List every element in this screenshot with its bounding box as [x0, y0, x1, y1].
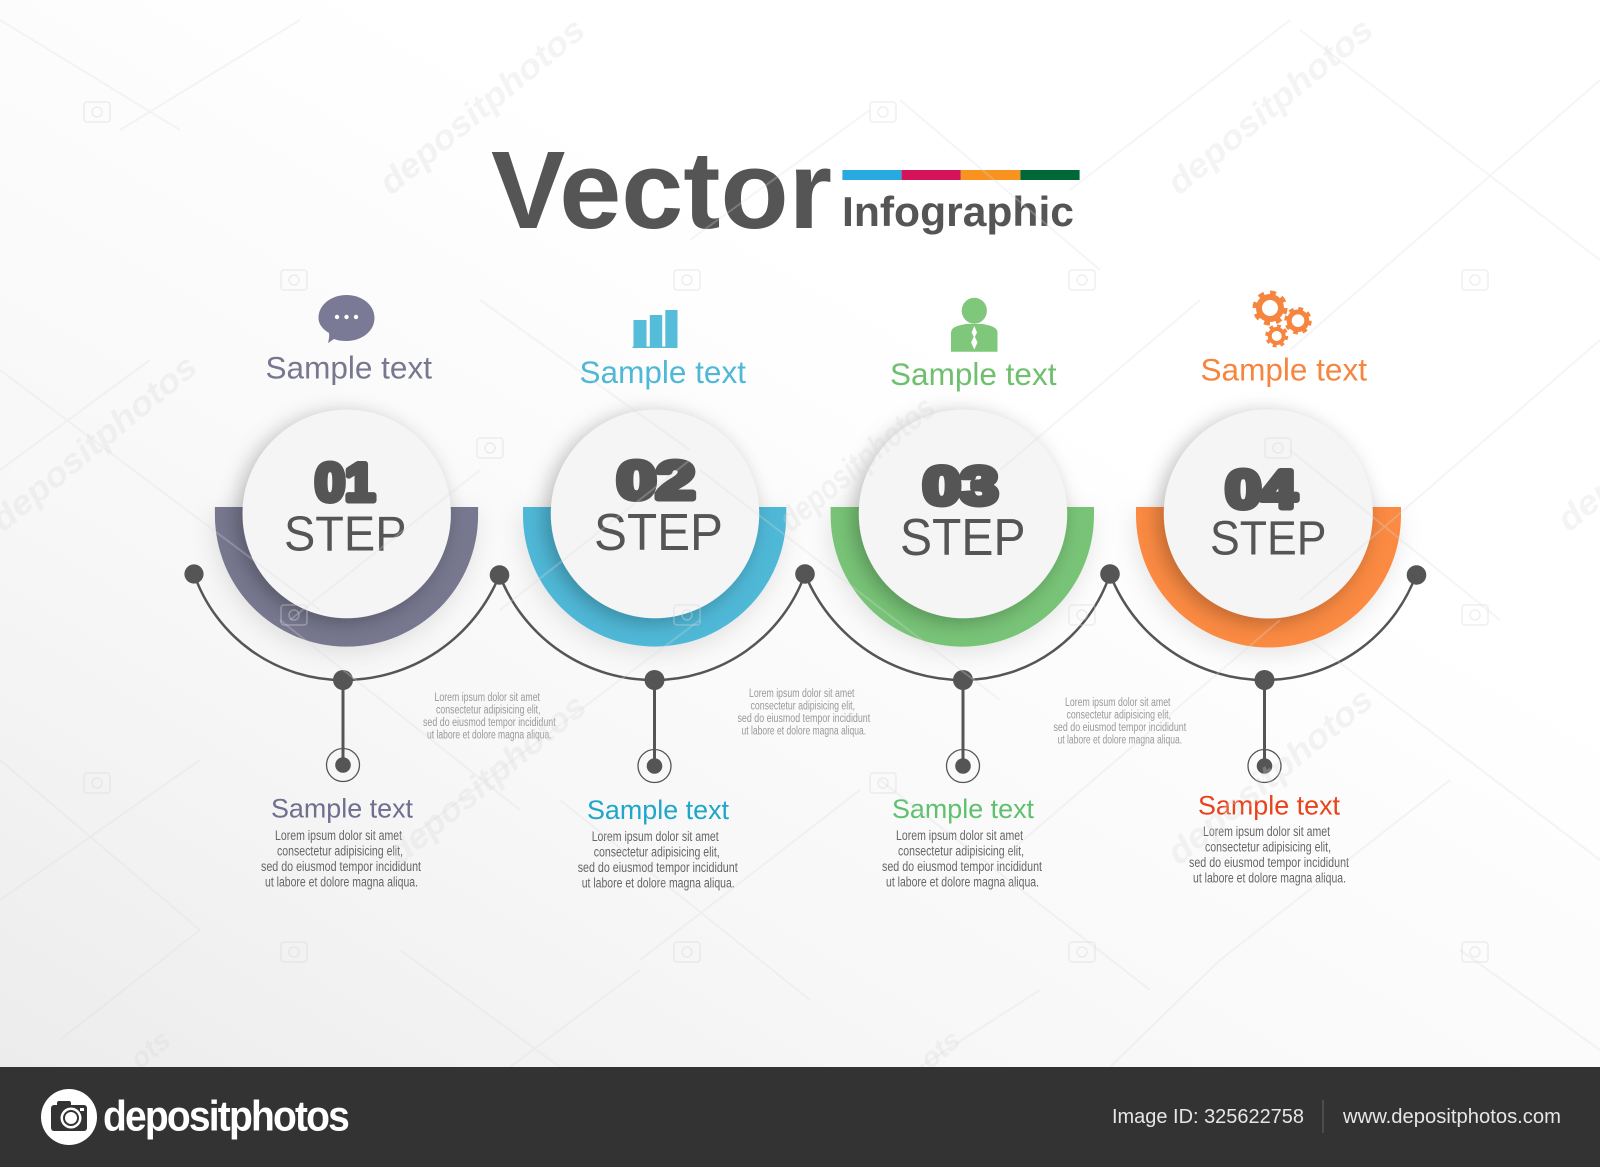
step 4 circle	[1164, 410, 1373, 618]
step 1 caption heading: Sample text	[271, 794, 413, 824]
step 3 caption text	[882, 828, 1042, 890]
step 3 caption text: sed do eiusmod tempor incididunt	[882, 859, 1042, 874]
step 4 half ring	[1136, 507, 1401, 647]
watermark pattern: depositphotos	[772, 389, 942, 539]
side note between steps 2 and 3	[738, 688, 871, 738]
footer logo wordmark: depositphotos	[103, 1092, 349, 1140]
step 4 label: STEP	[1210, 512, 1326, 566]
step 4 caption heading: Sample text	[1198, 790, 1340, 820]
step 2 label: STEP	[594, 504, 723, 562]
step 4 number: 04	[1226, 460, 1297, 520]
step 1 caption text: consectetur adipisicing elit,	[277, 844, 403, 859]
step 4 caption text	[1189, 824, 1349, 886]
step 1 caption text	[261, 828, 421, 890]
step 2 caption text: consectetur adipisicing elit,	[594, 845, 720, 860]
side note between steps 3 and 4: Lorem ipsum dolor sit amet	[1065, 697, 1171, 709]
side note between steps 1 and 2: sed do eiusmod tempor incididunt	[423, 717, 556, 729]
step 2 heading: Sample text	[580, 354, 746, 390]
connector arcs and nodes	[184, 564, 1426, 680]
watermark pattern: ots	[124, 1024, 176, 1075]
title word: Infographic: Infographic	[842, 188, 1074, 235]
side note between steps 2 and 3: ut labore et dolore magna aliqua.	[742, 726, 866, 738]
step 3 caption heading: Sample text	[892, 794, 1034, 824]
step 4 icon: gears	[1254, 292, 1310, 346]
step 3 icon: person with tie	[951, 298, 998, 352]
side note between steps 2 and 3: Lorem ipsum dolor sit amet	[749, 688, 855, 700]
step 1 half ring	[215, 507, 478, 647]
step 3 caption text: ut labore et dolore magna aliqua.	[886, 875, 1039, 890]
watermark pattern: depositphotos	[381, 687, 594, 872]
step 2 stem and target	[638, 670, 671, 782]
step 3 number: 03	[923, 457, 998, 516]
step 1 stem and target	[326, 670, 360, 782]
step 1	[215, 295, 478, 890]
step 2 half ring	[523, 507, 786, 647]
step 3 label: STEP	[900, 509, 1026, 567]
watermark pattern: ots	[914, 1024, 966, 1075]
step 1 icon: speech bubble	[318, 295, 374, 343]
title word: Vector: Vector	[491, 129, 832, 252]
step 2 caption text	[578, 829, 738, 891]
step 2 caption text: Lorem ipsum dolor sit amet	[592, 829, 719, 844]
step 3	[831, 298, 1094, 890]
step 3 caption text: Lorem ipsum dolor sit amet	[896, 828, 1023, 843]
side note between steps 3 and 4: consectetur adipisicing elit,	[1066, 709, 1171, 721]
side note between steps 1 and 2: consectetur adipisicing elit,	[436, 704, 540, 716]
step 1 caption text: sed do eiusmod tempor incididunt	[261, 859, 421, 874]
step 4	[1136, 292, 1401, 886]
step 3 caption text: consectetur adipisicing elit,	[898, 844, 1024, 859]
step 2 caption heading: Sample text	[587, 795, 729, 825]
step 1 caption text: ut labore et dolore magna aliqua.	[265, 875, 418, 890]
side note between steps 2 and 3: sed do eiusmod tempor incididunt	[738, 713, 871, 725]
step 1 label: STEP	[284, 508, 406, 562]
step 1 number: 01	[315, 454, 375, 512]
side note between steps 3 and 4: sed do eiusmod tempor incididunt	[1054, 722, 1187, 734]
side note between steps 2 and 3: consectetur adipisicing elit,	[750, 700, 855, 712]
side note between steps 1 and 2: Lorem ipsum dolor sit amet	[434, 692, 541, 704]
step 2 circle	[551, 410, 759, 618]
footer website: www.depositphotos.com	[1342, 1106, 1561, 1128]
side note between steps 3 and 4	[1054, 697, 1187, 747]
step 4 caption text: sed do eiusmod tempor incididunt	[1189, 855, 1349, 870]
footer bar	[0, 1067, 1600, 1167]
step 2 caption text: sed do eiusmod tempor incididunt	[578, 860, 738, 875]
side note between steps 3 and 4: ut labore et dolore magna aliqua.	[1058, 735, 1182, 747]
step 3 heading: Sample text	[890, 356, 1057, 392]
watermark pattern: depositphotos	[1160, 680, 1381, 872]
step 4 stem and target	[1248, 670, 1281, 782]
side note between steps 1 and 2: ut labore et dolore magna aliqua.	[427, 730, 552, 742]
step 1 caption text: Lorem ipsum dolor sit amet	[275, 828, 402, 843]
step 4 caption text: ut labore et dolore magna aliqua.	[1193, 871, 1346, 886]
footer image id: Image ID: 325622758	[1112, 1106, 1304, 1128]
step 2 caption text: ut labore et dolore magna aliqua.	[582, 876, 735, 891]
step 2 icon: bar chart	[632, 310, 678, 348]
step 2	[523, 310, 786, 891]
step 4 caption text: consectetur adipisicing elit,	[1205, 840, 1331, 855]
title colour bar	[842, 170, 1080, 180]
step 4 heading: Sample text	[1200, 352, 1367, 388]
step 3 stem and target	[946, 670, 980, 782]
step 2 number: 02	[617, 452, 695, 510]
footer logo icon: camera	[41, 1089, 97, 1145]
watermark pattern: depositphotos	[372, 10, 593, 202]
side note between steps 1 and 2	[423, 692, 556, 742]
title	[491, 129, 1080, 252]
step 1 heading: Sample text	[266, 350, 432, 386]
step 3 half ring	[831, 507, 1094, 647]
watermark pattern: depositphotos	[1160, 10, 1381, 202]
step 4 caption text: Lorem ipsum dolor sit amet	[1203, 824, 1330, 839]
step 3 circle	[859, 410, 1067, 618]
step 1 circle	[243, 410, 451, 618]
